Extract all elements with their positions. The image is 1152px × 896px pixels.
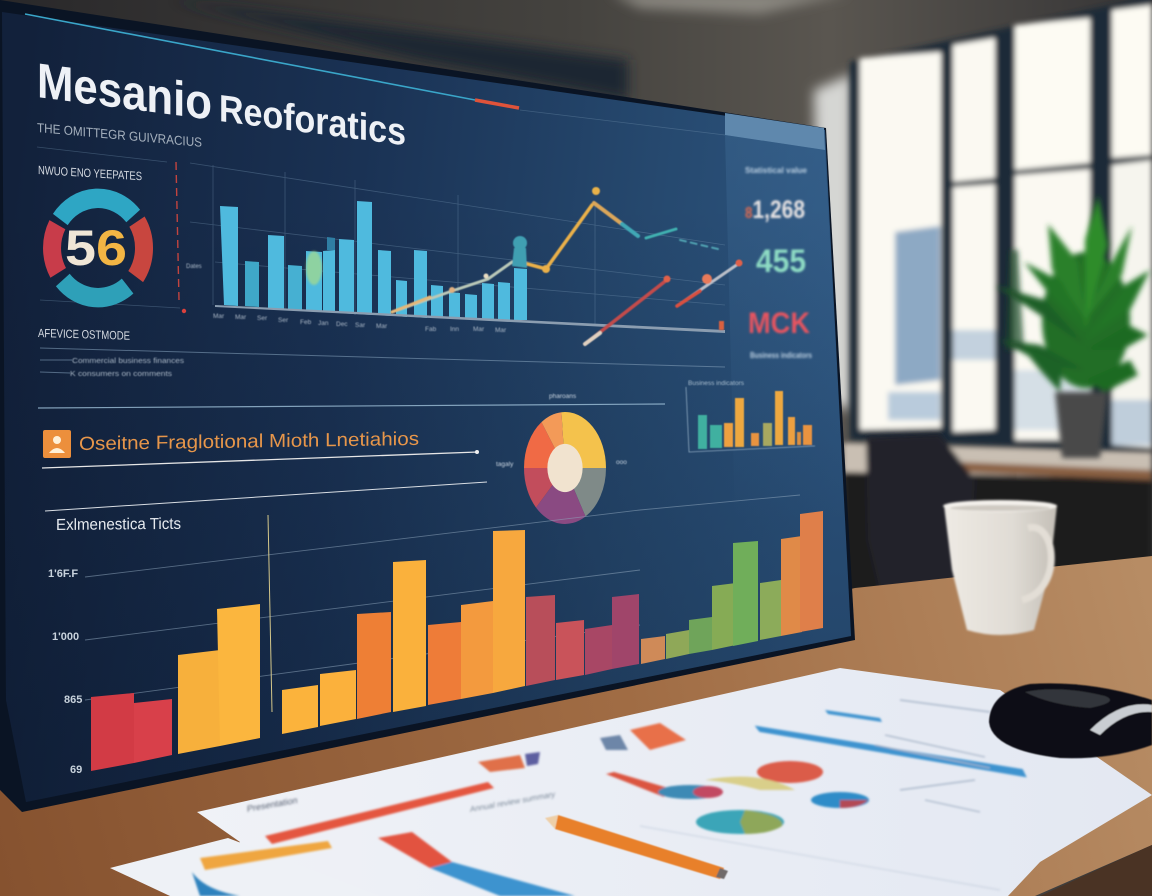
x axis labels: Fab <box>425 326 437 333</box>
line chart: rising trend <box>392 187 722 312</box>
mouse <box>989 683 1152 758</box>
upper bar chart <box>220 201 527 320</box>
lower chart y labels: 69 <box>70 764 82 776</box>
overview text rows: Commercial business finances <box>72 358 185 365</box>
section heading: overview: AFEVICE OSTMODE <box>38 326 130 343</box>
pie side labels: ooo <box>616 459 627 466</box>
line chart: red trends <box>585 260 742 344</box>
lower bar chart <box>91 511 823 771</box>
red axis marker <box>176 162 186 313</box>
lower chart y labels: 1'6F.F <box>48 568 78 580</box>
axis label: Dates <box>186 264 202 270</box>
lower chart y labels: 1'000 <box>52 631 79 643</box>
pie chart <box>524 412 606 524</box>
pie side labels <box>496 459 627 468</box>
lower chart y labels <box>48 568 82 776</box>
paper: front sheet <box>110 838 380 896</box>
title <box>37 53 406 154</box>
donut gauge <box>52 198 144 298</box>
icon: orange badge <box>43 430 71 458</box>
small bar chart <box>686 380 815 452</box>
x axis labels: Sar <box>355 322 366 329</box>
pencil <box>545 815 728 879</box>
chart baseline <box>215 305 725 333</box>
lower chart y labels: 865 <box>64 694 82 706</box>
orange heading: Oseitne Fraglotional Mioth Lnetiahios <box>79 429 419 455</box>
section heading: gauge: NWUO ENO YEEPATES <box>38 163 142 183</box>
side panel: key figures: MCK <box>748 307 810 340</box>
paper legend blocks <box>478 723 686 772</box>
side desk and chairs <box>843 434 1152 600</box>
divider lines <box>38 404 665 511</box>
grid lines <box>37 110 725 325</box>
x axis labels: Mar <box>376 323 388 330</box>
papers on desk <box>110 668 1152 896</box>
paper charts: Annual review summary <box>470 790 555 814</box>
chart highlight blob <box>306 251 322 285</box>
title: Reoforatics <box>219 87 406 154</box>
paper: back sheet <box>170 668 1152 896</box>
side panel: key figures <box>745 166 812 360</box>
lower chart axis and grid <box>85 495 800 700</box>
table front edge <box>1040 845 1152 896</box>
x axis labels: Feb <box>300 319 312 326</box>
x axis labels: Mar <box>235 314 247 321</box>
x axis labels: Jan <box>318 320 329 327</box>
pie label: pharoans <box>549 393 577 400</box>
panel: dashboard screen <box>0 0 855 812</box>
x axis labels: Ser <box>278 317 289 324</box>
lower chart heading: Exlmenestica Ticts <box>56 516 181 534</box>
plant <box>996 196 1150 458</box>
side panel: key figures: 455 <box>756 243 806 279</box>
x axis labels: Ser <box>257 315 268 322</box>
gauge value: 56 <box>65 220 127 276</box>
table <box>0 556 1152 896</box>
paper caption: Presentation <box>247 795 297 814</box>
paper charts <box>192 700 1025 896</box>
title: Mesanio <box>37 53 212 131</box>
x axis labels: Dec <box>336 321 348 328</box>
accent line <box>25 14 519 108</box>
overview text rows: K consumers on comments <box>70 371 173 378</box>
side panel: key figures: Business indicators <box>750 351 812 360</box>
x axis labels: Mar <box>473 326 485 333</box>
side panel: key figures: Statistical value <box>745 166 808 175</box>
x axis labels: Mar <box>213 313 225 320</box>
window with city view <box>850 0 1152 452</box>
x axis labels: Inn <box>450 326 459 333</box>
vertical marker <box>268 515 272 712</box>
overview text rows <box>40 348 725 378</box>
side panel: key figures: 81,268 <box>745 196 805 224</box>
x axis labels <box>213 313 507 334</box>
coffee mug <box>943 500 1057 635</box>
x axis labels: Mar <box>495 327 507 334</box>
small bar chart: Business indicators <box>688 380 745 387</box>
subtitle: THE OMITTEGR GUIVRACIUS <box>37 120 202 150</box>
pie side labels: tagaly <box>496 461 514 468</box>
